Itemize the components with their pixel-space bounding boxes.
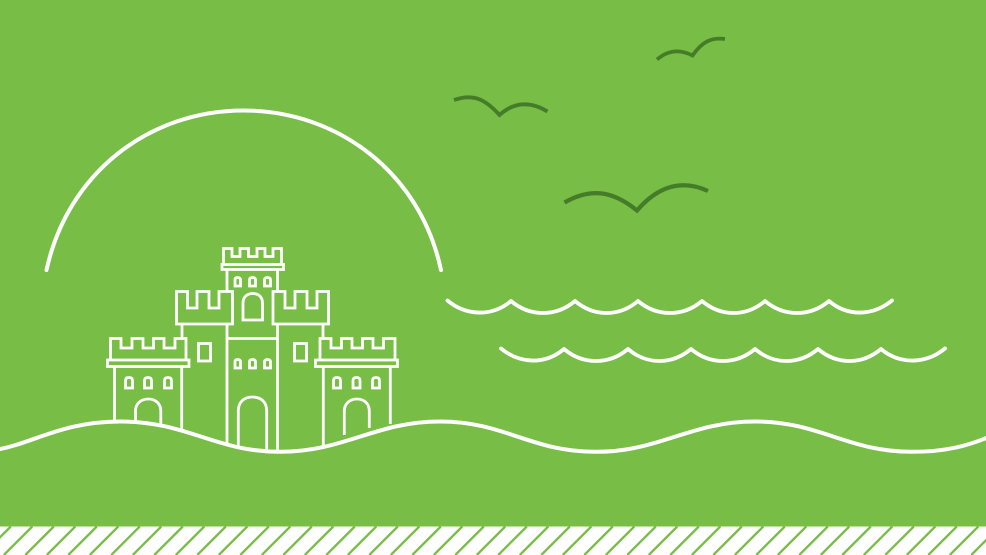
striped ground band [0, 526, 986, 555]
left battlement [176, 292, 232, 324]
right battlement [273, 292, 328, 324]
castle [108, 248, 398, 451]
wave row two [501, 348, 945, 361]
right tower [316, 338, 398, 446]
top tower [222, 248, 284, 320]
bird: large [564, 185, 708, 210]
wave row one [448, 300, 892, 313]
sun arc [46, 110, 441, 270]
bird: small [657, 39, 725, 60]
central keep [182, 324, 323, 451]
rolling hill line [0, 422, 986, 452]
bird: middle [454, 97, 548, 115]
left tower [108, 338, 189, 429]
